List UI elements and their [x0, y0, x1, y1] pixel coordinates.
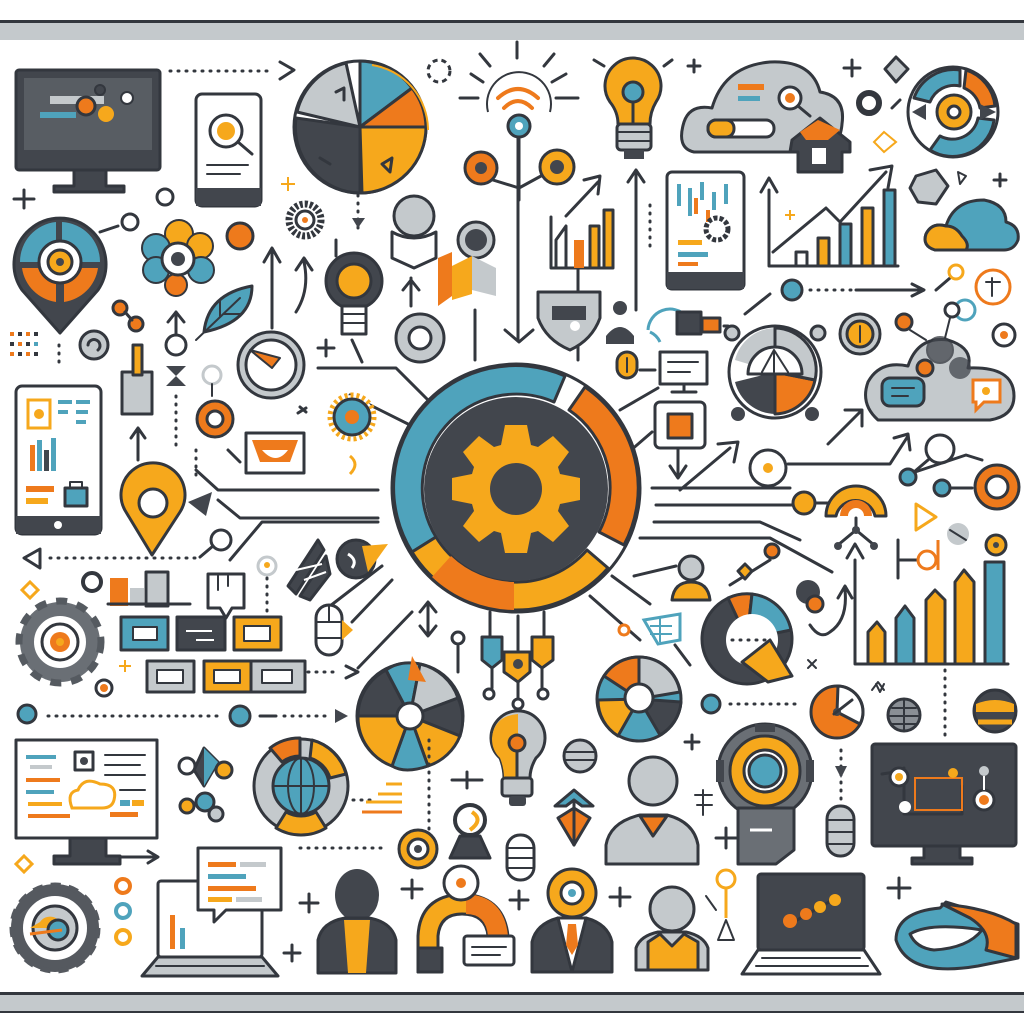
icon: small rings left [100, 177, 295, 232]
icon: long dotted timeline [18, 705, 348, 726]
icon: ribbon loop [896, 902, 1018, 969]
hub: central gear ring [392, 364, 640, 612]
icon: diamond top right [885, 57, 908, 82]
icon: gauge dial [238, 332, 304, 398]
arrow: dotted right top [170, 62, 294, 79]
icon: window with arrow [655, 402, 705, 478]
icon: globe wheel [254, 738, 348, 835]
icon: laptop screen chart left [16, 740, 158, 864]
icon: person dark with yellow [300, 869, 422, 973]
icon: flower cluster [142, 220, 214, 296]
icon: play triangle [916, 504, 969, 545]
icon: chip connectors under hub [452, 612, 553, 709]
bottom band [0, 992, 1024, 1013]
icon: small plus marks top [14, 60, 860, 208]
icon: ring small [859, 93, 900, 152]
chart: large bars bottom right [847, 535, 1008, 664]
icon: phone with magnifier [196, 94, 261, 206]
icon: nodes left [113, 301, 186, 355]
icon: person with collar gray [606, 757, 736, 864]
icon: robot head and arrows [634, 556, 770, 600]
icon: bulb center bottom [429, 711, 545, 840]
icon: hexagon gray [910, 170, 1006, 204]
icon: capsule center [507, 835, 534, 880]
icon: large yellow gear ring [716, 724, 814, 864]
icon: arrow dots down [352, 195, 365, 230]
icon: target wheel [908, 67, 998, 157]
icon: small ring and squares row [22, 572, 190, 606]
icon: vertical colored dots [16, 856, 130, 944]
icon: cloud server house [790, 118, 850, 172]
icon: cloud chat network [866, 303, 1014, 420]
icon: dotted grid swatch [10, 332, 38, 356]
chart: top pie [294, 61, 428, 193]
icon: small target circles bottom [300, 805, 490, 868]
icon: capsule and yellow [308, 602, 436, 678]
icon: triangles and dotted [166, 366, 221, 450]
icon: robot dome [725, 326, 825, 421]
icon: rising arrow and nodes [680, 434, 982, 558]
top band [0, 20, 1024, 40]
icon: signal bulb and branches [460, 42, 578, 200]
icon: connected nodes right [745, 265, 1015, 346]
icon: feather bars [288, 540, 330, 600]
icon: chat bubble [208, 557, 276, 625]
icon: plus near laptop [888, 878, 910, 898]
icon: gray circle small [564, 735, 699, 772]
chart: small bars with arrow [551, 176, 613, 268]
icon: cylinder person gray [318, 196, 444, 362]
icon: gear left [19, 601, 101, 683]
icon: yellow blue cloud [925, 200, 1018, 250]
icon: orange dot [227, 223, 253, 249]
connector lines around the hub [196, 120, 832, 668]
icon: top yellow bulb [594, 58, 672, 159]
icon: laptop with chat card [142, 848, 300, 976]
icon: yellow map pin [121, 450, 212, 555]
icon: swirl badge [59, 331, 108, 368]
icon: arrows up stack [555, 790, 712, 845]
icon: central yellow gear [452, 425, 580, 553]
icon: small nodes line right [702, 670, 1016, 738]
icon: shield [538, 292, 600, 350]
icon: monitor bottom right [872, 744, 1016, 864]
icon: laptop bottom right [742, 874, 880, 974]
icon: half circle dark and yellow [337, 540, 388, 578]
chart: circular pie with arrow [702, 580, 884, 692]
chart: small pie bottom middle [597, 657, 681, 741]
icon: yellow bulb with stand [296, 240, 382, 334]
icon: small workstation [606, 301, 728, 344]
icon: clipboard gray [122, 345, 152, 460]
icon: dashed circle [428, 60, 450, 82]
icon: arch connector with card [418, 866, 528, 972]
icon: person gray with yellow vest [636, 870, 735, 970]
chart: segmented wheel [357, 656, 463, 770]
panel: colored boxes [96, 617, 305, 696]
icon: cloud with magnifier [682, 62, 843, 152]
icon: left arrow dotted [24, 530, 231, 568]
icon: sun gear [289, 204, 321, 236]
icon: top left monitor [16, 70, 160, 192]
icon: tablet chart top [650, 172, 744, 289]
icon: yellow dial [840, 314, 880, 354]
icon: leaf [196, 286, 252, 340]
icon: businessman yellow head [532, 869, 630, 972]
chart: rising bars top right [761, 166, 898, 266]
icon: pixel arrow [619, 614, 690, 665]
icon: envelope orange [228, 433, 304, 473]
icon: small arrows mid right [828, 410, 862, 444]
icon: orange ring [197, 401, 233, 437]
icon: rainbow arch [826, 486, 886, 550]
icon: tablet left [16, 386, 101, 534]
icon: dark circle with flags [438, 222, 496, 306]
icon: cluster of cubes [179, 748, 232, 821]
icon: sun target [298, 395, 374, 474]
icon: list mini [353, 784, 402, 812]
icon: gear lower left [12, 885, 98, 971]
icon: capsule right [827, 750, 854, 856]
icon: map pin with rings [14, 218, 106, 333]
icon: small yellow pill [617, 352, 707, 410]
icon: concentric orange ring right [975, 465, 1019, 509]
